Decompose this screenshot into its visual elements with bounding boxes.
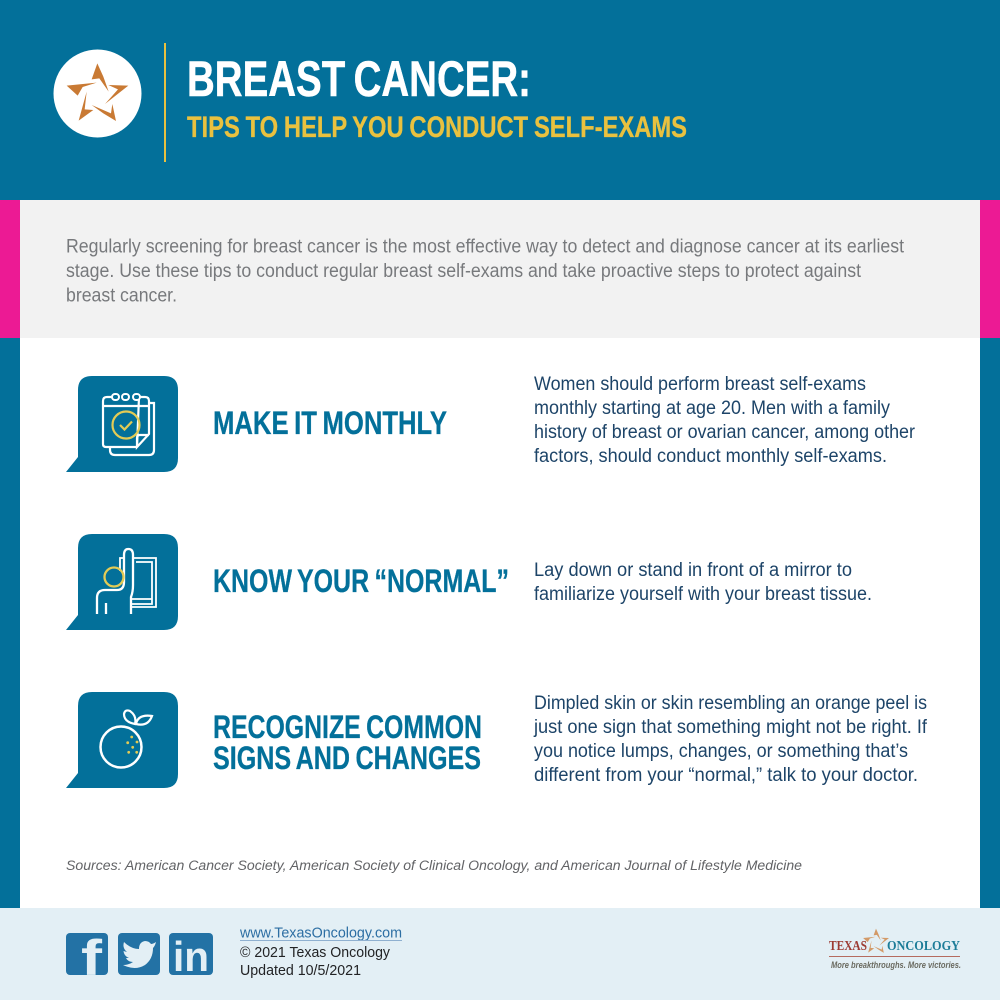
description: Lay down or stand in front of a mirror to	[534, 560, 852, 581]
heading: RECOGNIZE COMMON	[213, 709, 482, 745]
intro text: Regularly screening for breast cancer is the most effective way to detect and diagnose cancer at its earliest	[66, 236, 905, 258]
header divider	[164, 43, 166, 162]
description: familiarize yourself with your breast tissue.	[534, 584, 872, 605]
sources note: Sources: American Cancer Society, American Society of Clinical Oncology, and American Journal of Lifestyle Medicine	[66, 858, 802, 873]
heading: MAKE IT MONTHLY	[213, 405, 447, 441]
left side band	[0, 338, 20, 908]
header panel	[0, 0, 1000, 200]
icon: star logo badge	[54, 50, 142, 138]
logo: Texas Oncology: ONCOLOGY	[887, 939, 960, 954]
description: you notice lumps, changes, or something that’s	[534, 741, 908, 762]
icon: orange speech bubble	[66, 692, 178, 788]
logo: Texas Oncology: TEXAS	[829, 939, 867, 954]
description: factors, should conduct monthly self-exams.	[534, 446, 887, 467]
description: Women should perform breast self-exams	[534, 374, 866, 395]
description: Dimpled skin or skin resembling an orange peel is	[534, 693, 927, 714]
panel: know your normal	[66, 534, 872, 630]
icon: calendar speech bubble	[66, 376, 178, 472]
description: just one sign that something might not be right. If	[533, 717, 928, 738]
intro text: breast cancer.	[66, 286, 177, 306]
heading: SIGNS AND CHANGES	[213, 740, 481, 776]
website link: www.TexasOncology.com	[239, 926, 402, 942]
icon: facebook	[66, 930, 108, 986]
logo: Texas Oncology	[829, 929, 961, 970]
title: BREAST CANCER:	[187, 51, 531, 107]
right side band	[980, 338, 1000, 908]
intro text: stage. Use these tips to conduct regular breast self-exams and take proactive steps to protect against	[66, 261, 862, 282]
panel: make it monthly	[66, 374, 920, 472]
icon: linkedin: in	[173, 933, 209, 980]
description: history of breast or ovarian cancer, among other	[534, 422, 916, 443]
panel: footer	[0, 908, 1000, 1000]
logo: Texas Oncology: More breakthroughs. More victories.	[831, 960, 961, 970]
icon: twitter	[118, 933, 160, 975]
copyright and update date: © 2021 Texas Oncology	[240, 945, 391, 961]
panel: introduction	[0, 200, 1000, 338]
icon: facebook: f	[81, 930, 102, 986]
description: different from your “normal,” talk to your doctor.	[534, 765, 918, 786]
copyright and update date: Updated 10/5/2021	[240, 963, 361, 979]
icon: hand and mirror speech bubble	[66, 534, 178, 630]
heading: KNOW YOUR “NORMAL”	[213, 563, 509, 599]
subtitle: TIPS TO HELP YOU CONDUCT SELF-EXAMS	[187, 111, 687, 144]
panel: recognize common signs	[66, 692, 932, 788]
description: monthly starting at age 20. Men with a family	[534, 398, 890, 419]
